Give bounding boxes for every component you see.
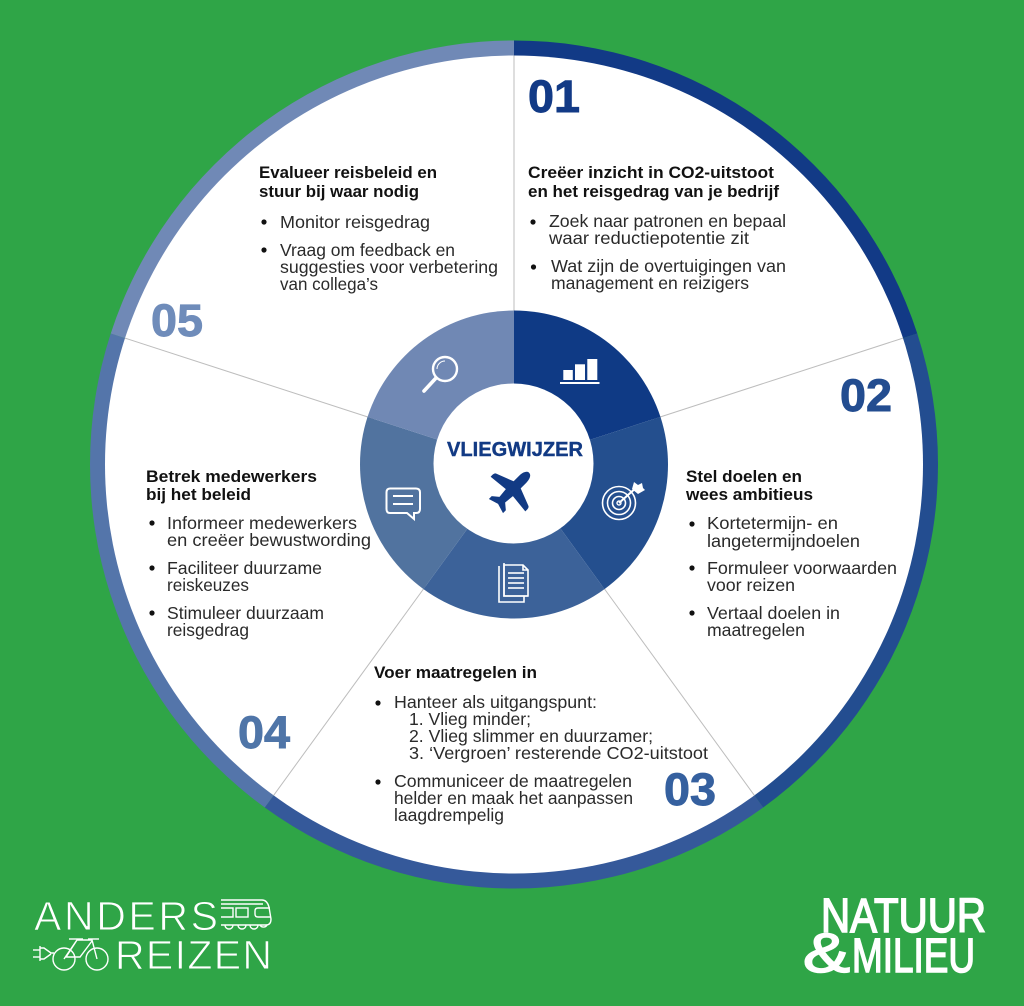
- heading step 01: Creëer inzicht in CO2-uitstoot: [528, 163, 774, 182]
- heading step 05: Evalueer reisbeleid en: [259, 163, 437, 182]
- bullets step 01: Zoek naar patronen en bepaal: [549, 211, 786, 231]
- bullets step 03: [375, 692, 708, 825]
- heading step 05: [259, 163, 437, 201]
- number 05: 05: [151, 295, 203, 346]
- bullets step 04: [149, 513, 371, 640]
- bullets step 05: Monitor reisgedrag: [280, 212, 430, 232]
- bullets step 03: laagdrempelig: [394, 805, 504, 825]
- heading step 01: [528, 163, 779, 201]
- inner ring segment 05: [368, 310, 514, 464]
- number 04: 04: [238, 707, 290, 758]
- heading step 05: stuur bij waar nodig: [259, 182, 419, 201]
- icon: bicycle with plug: [33, 939, 108, 970]
- bullets step 02: langetermijndoelen: [707, 531, 860, 551]
- outer ring segment 01: [514, 40, 917, 464]
- number 02: 02: [840, 370, 892, 421]
- bullets step 04: Faciliteer duurzame: [167, 558, 322, 578]
- panel: step 03: [374, 663, 716, 825]
- bullets step 03: Hanteer als uitgangspunt:: [394, 692, 597, 712]
- bullets step 01: waar reductiepotentie zit: [548, 228, 749, 248]
- number 03: 03: [664, 764, 716, 815]
- outer ring segment 04: [90, 333, 514, 808]
- title: Vliegwijzer: VLIEGWIJZER: [447, 439, 584, 461]
- bullets step 01: Wat zijn de overtuigingen van: [551, 256, 786, 276]
- outer ring segment 03: [265, 464, 763, 888]
- panel: step 02: [685, 370, 897, 640]
- logo: Natuur & Milieu: &: [803, 921, 850, 984]
- inner white circle: [434, 384, 594, 544]
- icon: speech bubble: [386, 488, 420, 519]
- bullets step 03: helder en maak het aanpassen: [394, 788, 633, 808]
- bullets step 05: Vraag om feedback en: [280, 240, 455, 260]
- logo: Natuur & Milieu: [803, 890, 986, 984]
- bullets step 03: 1. Vlieg minder;: [409, 709, 531, 729]
- bullets step 05: [261, 212, 498, 294]
- icon: train: [221, 900, 271, 929]
- heading step 02: Stel doelen en: [686, 467, 802, 486]
- heading step 04: bij het beleid: [146, 485, 251, 504]
- bullets step 02: Vertaal doelen in: [707, 603, 840, 623]
- icon: airplane: [479, 455, 547, 523]
- logo text: Anders: ANDERS: [34, 893, 218, 939]
- heading step 01: en het reisgedrag van je bedrijf: [528, 182, 779, 201]
- bullets step 04: Stimuleer duurzaam: [167, 603, 324, 623]
- bullets step 04: Informeer medewerkers: [167, 513, 357, 533]
- bullets step 03: Communiceer de maatregelen: [394, 771, 632, 791]
- outer ring segment 02: [514, 333, 938, 808]
- logo: Natuur & Milieu: MILIEU: [852, 930, 975, 983]
- bullets step 02: voor reizen: [707, 575, 795, 595]
- circular diagram: [90, 40, 938, 888]
- heading step 04: [146, 467, 317, 504]
- bullets step 02: Formuleer voorwaarden: [707, 558, 897, 578]
- bullets step 02: Kortetermijn- en: [707, 513, 838, 533]
- bullets step 01: [530, 211, 786, 293]
- inner ring segment 04: [360, 417, 514, 589]
- bullets step 02: maatregelen: [707, 620, 805, 640]
- bullets step 04: reisgedrag: [167, 620, 249, 640]
- panel: step 04: [146, 467, 371, 758]
- icon: bar chart: [560, 359, 600, 384]
- bullets step 02: [689, 513, 897, 640]
- heading step 02: wees ambitieus: [685, 485, 813, 504]
- inner ring segment 03: [423, 464, 605, 619]
- logo text: Reizen: REIZEN: [115, 932, 272, 978]
- bullets step 04: reiskeuzes: [167, 575, 249, 595]
- bullets step 01: management en reizigers: [551, 273, 749, 293]
- icon: magnifier: [424, 357, 457, 391]
- bullets step 04: en creëer bewustwording: [167, 530, 371, 550]
- heading step 04: Betrek medewerkers: [146, 467, 317, 486]
- bullets step 03: 2. Vlieg slimmer en duurzamer;: [409, 726, 653, 746]
- number 01: 01: [528, 71, 580, 122]
- logo: Natuur & Milieu: NATUUR: [821, 890, 986, 943]
- bullets step 05: van collega’s: [280, 274, 378, 294]
- icon: document: [499, 563, 528, 602]
- white disc: [105, 56, 923, 874]
- bullets step 05: suggesties voor verbetering: [280, 257, 498, 277]
- inner ring segment 01: [514, 310, 660, 464]
- heading step 02: [685, 467, 813, 504]
- icon: target: [602, 482, 645, 520]
- bullets step 03: 3. ‘Vergroen’ resterende CO2-uitstoot: [409, 743, 708, 763]
- heading step 03: Voer maatregelen in: [374, 663, 537, 682]
- logo: Anders Reizen: [33, 893, 272, 978]
- sector divider lines: [125, 56, 903, 795]
- outer ring segment 05: [111, 40, 514, 464]
- inner ring segment 02: [514, 417, 668, 589]
- panel: step 01: [528, 71, 786, 293]
- panel: step 05: [151, 163, 498, 346]
